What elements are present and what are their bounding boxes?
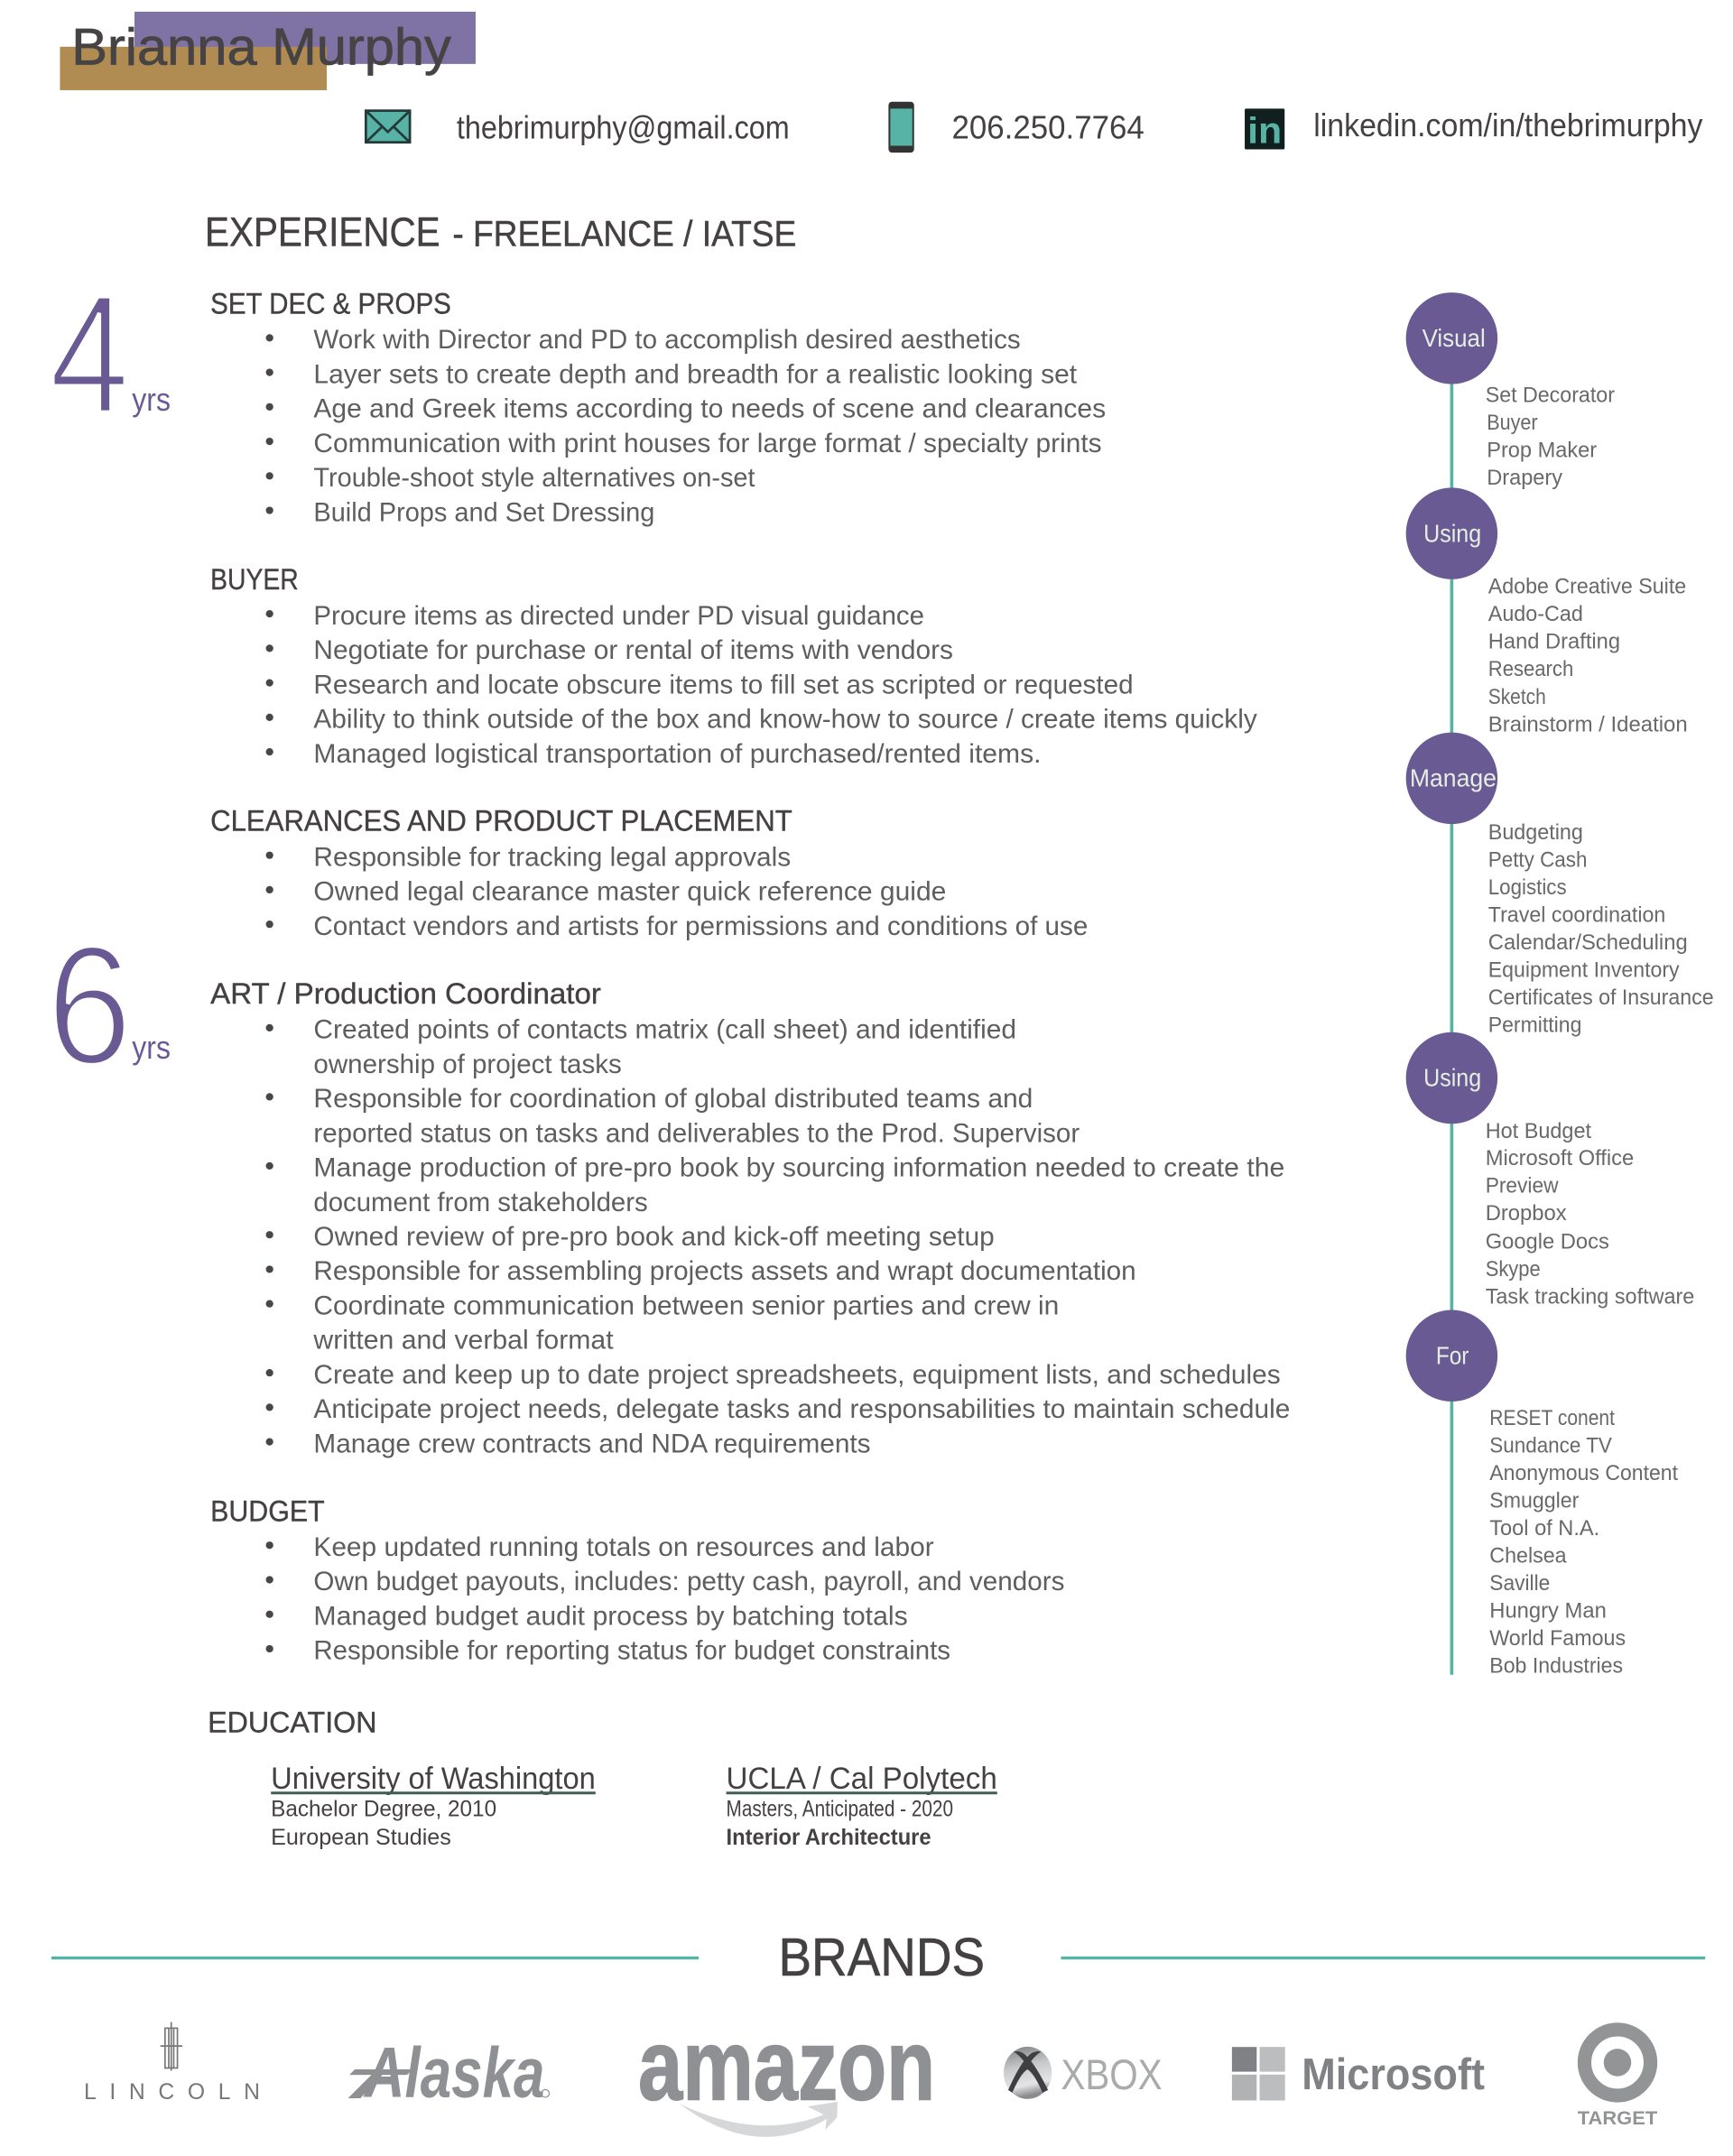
section: art and production coordinator: Manage crew contracts and NDA requirements bbox=[313, 1429, 871, 1458]
phone number: 206.250.7764 bbox=[951, 109, 1145, 145]
school: university of washington: European Studies bbox=[271, 1825, 451, 1850]
education heading: EDUCATION bbox=[208, 1707, 377, 1739]
brands heading with rules: BRANDS bbox=[778, 1927, 985, 1987]
section: set dec and props: Age and Greek items according to needs of scene and clearances bbox=[313, 394, 1106, 424]
section heading: SET DEC & PROPS bbox=[210, 287, 451, 319]
list: clients: Tool of N.A. bbox=[1489, 1516, 1599, 1541]
purple name backdrop bbox=[134, 12, 476, 64]
email: thebrimurphy@gmail.com bbox=[457, 109, 790, 145]
stat: 6 yrs: yrs bbox=[132, 1029, 171, 1066]
node: visual: Visual bbox=[1423, 324, 1486, 352]
section: art and production coordinator: Responsible for coordination of global distributed teams and bbox=[313, 1084, 1033, 1114]
list: visual roles: Set Decorator bbox=[1486, 384, 1615, 408]
list: management duties: Logistics bbox=[1488, 875, 1567, 900]
timeline line bbox=[1450, 338, 1453, 1675]
section: set dec and props: Build Props and Set Dressing bbox=[313, 497, 654, 527]
list: management duties: Calendar/Scheduling bbox=[1488, 930, 1688, 955]
school: university of washington: Bachelor Degree, 2010 bbox=[271, 1797, 496, 1822]
section: art and production coordinator: document from stakeholders bbox=[313, 1188, 648, 1217]
list: clients: Bob Industries bbox=[1489, 1653, 1623, 1678]
section: art and production coordinator: written and verbal format bbox=[312, 1326, 614, 1356]
name: Brianna Murphy bbox=[71, 18, 451, 76]
node: using bbox=[1406, 487, 1497, 579]
list: clients: RESET conent bbox=[1489, 1406, 1615, 1430]
logo: lincoln bbox=[84, 2022, 260, 2105]
section heading: CLEARANCES AND PRODUCT PLACEMENT bbox=[210, 805, 792, 837]
section: buyer: Research and locate obscure items to fill set as scripted or requested bbox=[313, 670, 1134, 699]
section: art and production coordinator: Manage production of pre-pro book by sourcing information needed to create the bbox=[313, 1153, 1284, 1183]
node: using: Using bbox=[1423, 1064, 1481, 1092]
list: software: Preview bbox=[1486, 1174, 1559, 1198]
linkedin url: linkedin.com/in/thebrimurphy bbox=[1313, 107, 1703, 143]
node: using bbox=[1406, 1032, 1497, 1124]
node: for: For bbox=[1436, 1341, 1469, 1369]
section: art and production coordinator: Create and keep up to date project spreadsheets, equipment lists, and schedules bbox=[313, 1360, 1281, 1390]
list: software: Microsoft Office bbox=[1486, 1146, 1634, 1171]
section heading: BUYER bbox=[210, 563, 299, 596]
node: using: Using bbox=[1423, 519, 1481, 547]
timeline: roles and skills bbox=[1406, 292, 1714, 1678]
section: art and production coordinator bbox=[210, 977, 1290, 1458]
list: creative tools: Research bbox=[1488, 657, 1573, 681]
logo: alaska: Alaska bbox=[363, 2031, 544, 2112]
list: software: Google Docs bbox=[1486, 1229, 1609, 1254]
list: creative tools: Hand Drafting bbox=[1488, 629, 1620, 653]
logo: target bbox=[1578, 2030, 1657, 2129]
list: management duties: Petty Cash bbox=[1488, 848, 1587, 873]
icon: phone bbox=[888, 102, 914, 153]
logo: target: TARGET bbox=[1578, 2107, 1657, 2129]
section heading: ART / Production Coordinator bbox=[210, 977, 601, 1010]
node: manage bbox=[1406, 733, 1497, 824]
node: manage: Manage bbox=[1410, 763, 1497, 791]
list: management duties: Budgeting bbox=[1488, 820, 1583, 845]
section: clearances and product placement: Owned legal clearance master quick reference guide bbox=[313, 877, 946, 907]
list: management duties: Permitting bbox=[1488, 1013, 1581, 1037]
heading: experience: - FREELANCE / IATSE bbox=[452, 215, 796, 254]
list: software: Skype bbox=[1486, 1257, 1541, 1282]
section: art and production coordinator: Anticipate project needs, delegate tasks and responsabilities to maintain schedule bbox=[313, 1394, 1290, 1424]
logo: microsoft bbox=[1232, 2047, 1485, 2100]
list: visual roles: Buyer bbox=[1487, 411, 1538, 435]
list: creative tools: Sketch bbox=[1488, 685, 1546, 709]
school: ucla and cal polytech: Interior Architecture bbox=[727, 1825, 931, 1850]
list: management duties: Equipment Inventory bbox=[1488, 958, 1680, 983]
icon: envelope bbox=[366, 111, 410, 143]
list: software: Dropbox bbox=[1486, 1201, 1567, 1226]
logo: xbox: XBOX bbox=[1061, 2051, 1163, 2099]
list: visual roles: Drapery bbox=[1487, 466, 1563, 490]
section heading: BUDGET bbox=[210, 1495, 325, 1528]
section: set dec and props: Layer sets to create depth and breadth for a realistic looking set bbox=[313, 359, 1078, 389]
section: buyer: Ability to think outside of the box and know-how to source / create items quickly bbox=[313, 705, 1257, 735]
list: creative tools: Brainstorm / Ideation bbox=[1488, 713, 1688, 737]
section: set dec and props: Work with Director and PD to accomplish desired aesthetics bbox=[313, 325, 1021, 355]
section: art and production coordinator: Owned review of pre-pro book and kick-off meeting setup bbox=[313, 1222, 995, 1252]
section: clearances and product placement: Contact vendors and artists for permissions and conditions of use bbox=[313, 911, 1088, 941]
section: clearances and product placement: Responsible for tracking legal approvals bbox=[313, 842, 791, 872]
list: clients: Chelsea bbox=[1489, 1544, 1567, 1568]
logo: lincoln: LINCOLN bbox=[84, 2080, 260, 2105]
list: software: Task tracking software bbox=[1486, 1284, 1694, 1309]
section: budget: Keep updated running totals on resources and labor bbox=[313, 1532, 934, 1562]
gold name backdrop bbox=[60, 47, 327, 90]
section: art and production coordinator: Coordinate communication between senior parties and crew in bbox=[313, 1291, 1059, 1320]
logo: xbox bbox=[1004, 2047, 1163, 2099]
school: ucla and cal polytech: Masters, Anticipated - 2020 bbox=[727, 1797, 953, 1822]
section: clearances and product placement bbox=[210, 805, 1088, 941]
logo: microsoft: Microsoft bbox=[1302, 2050, 1485, 2099]
list: visual roles bbox=[1486, 384, 1615, 490]
node: visual bbox=[1406, 292, 1497, 384]
name header block bbox=[60, 12, 476, 90]
section: art and production coordinator: Responsible for assembling projects assets and wrapt documentation bbox=[313, 1256, 1136, 1286]
section: buyer: Managed logistical transportation of purchased/rented items. bbox=[313, 739, 1042, 769]
list: clients: Hungry Man bbox=[1489, 1599, 1607, 1624]
list: clients bbox=[1489, 1406, 1678, 1678]
list: software bbox=[1486, 1119, 1694, 1309]
school: ucla and cal polytech bbox=[727, 1762, 997, 1850]
list: creative tools: Audo-Cad bbox=[1488, 602, 1583, 626]
section: buyer: Procure items as directed under PD visual guidance bbox=[313, 601, 924, 631]
icon: linkedin: in bbox=[1247, 109, 1282, 151]
section: set dec and props: Communication with print houses for large format / specialty prints bbox=[313, 429, 1102, 458]
section: budget: Managed budget audit process by batching totals bbox=[313, 1601, 908, 1631]
school: university of washington: University of Washington bbox=[271, 1762, 596, 1796]
section: art and production coordinator: reported status on tasks and deliverables to the Prod. Supervisor bbox=[313, 1118, 1080, 1148]
section: budget: Responsible for reporting status for budget constraints bbox=[313, 1636, 950, 1666]
node: for bbox=[1406, 1310, 1497, 1402]
section: budget bbox=[210, 1495, 1064, 1666]
list: clients: Saville bbox=[1489, 1571, 1550, 1596]
section: set dec and props: Trouble-shoot style alternatives on-set bbox=[313, 463, 755, 493]
list: management duties: Travel coordination bbox=[1488, 903, 1665, 928]
list: clients: Sundance TV bbox=[1489, 1434, 1613, 1458]
section: art and production coordinator: ownership of project tasks bbox=[313, 1050, 622, 1079]
school: university of washington bbox=[271, 1762, 596, 1850]
list: management duties: Certificates of Insurance bbox=[1488, 985, 1714, 1010]
logo: amazon: amazon bbox=[638, 2009, 935, 2122]
list: management duties bbox=[1488, 820, 1714, 1037]
contact row bbox=[366, 102, 1703, 153]
section: buyer: Negotiate for purchase or rental of items with vendors bbox=[313, 635, 953, 665]
stat: 6 yrs: 6 bbox=[47, 911, 132, 1099]
list: clients: World Famous bbox=[1489, 1626, 1626, 1651]
school: ucla and cal polytech: UCLA / Cal Polytech bbox=[727, 1762, 997, 1796]
heading: experience: EXPERIENCE bbox=[205, 209, 440, 255]
list: clients: Smuggler bbox=[1489, 1489, 1579, 1513]
stat: 4 yrs: 4 bbox=[50, 259, 129, 449]
section: art and production coordinator: Created points of contacts matrix (call sheet) and identified bbox=[313, 1015, 1016, 1045]
section: set dec and props bbox=[210, 287, 1106, 527]
section: buyer bbox=[210, 563, 1257, 769]
list: creative tools: Adobe Creative Suite bbox=[1488, 574, 1686, 598]
list: software: Hot Budget bbox=[1486, 1119, 1591, 1143]
section: budget: Own budget payouts, includes: petty cash, payroll, and vendors bbox=[313, 1567, 1064, 1596]
list: creative tools bbox=[1488, 574, 1688, 737]
list: clients: Anonymous Content bbox=[1489, 1461, 1678, 1485]
list: visual roles: Prop Maker bbox=[1487, 439, 1597, 463]
heading: experience bbox=[205, 209, 796, 255]
stat: 4 yrs: yrs bbox=[132, 381, 171, 418]
section: education bbox=[208, 1707, 997, 1850]
